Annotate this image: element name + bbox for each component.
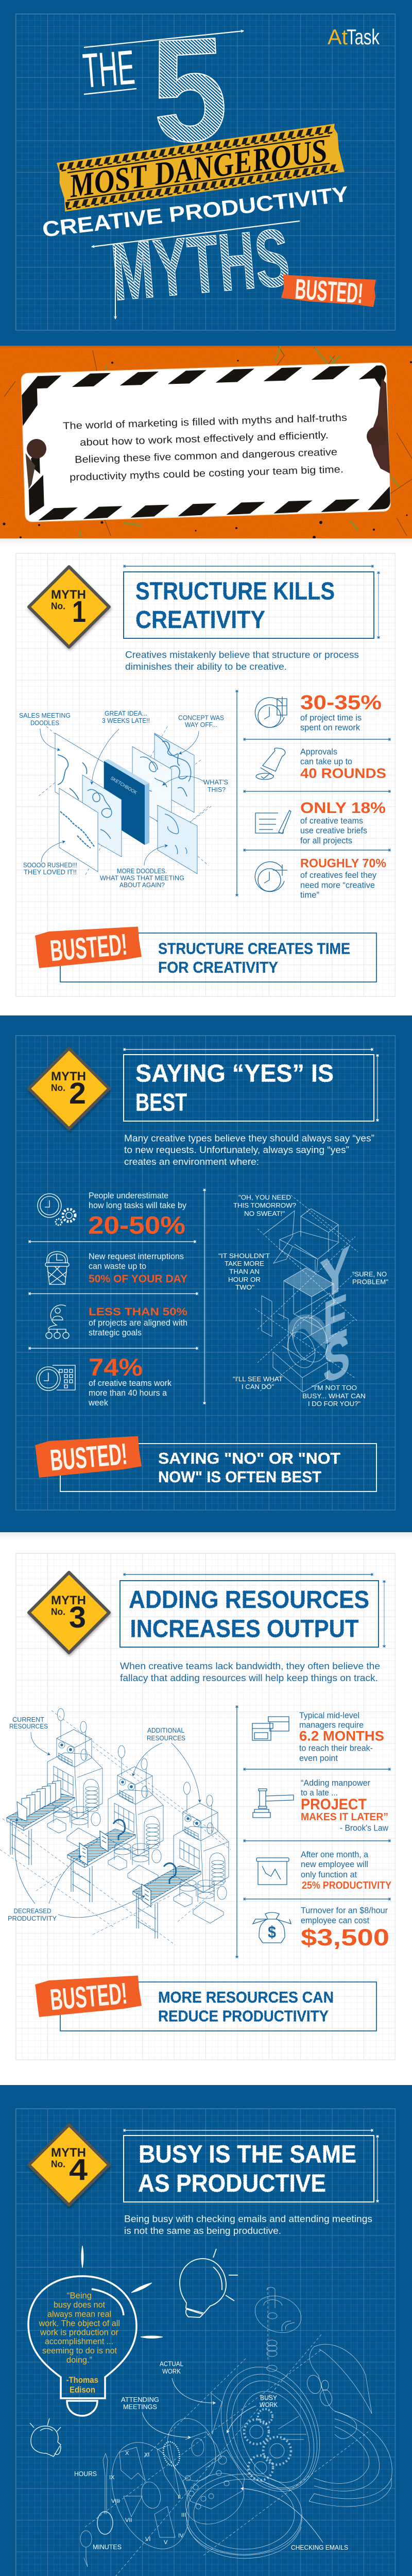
handwritten labels: MORE DOODLES. — [117, 867, 167, 875]
stat: roughly 70% want time: of creatives feel they — [300, 871, 377, 880]
divider — [29, 1348, 198, 1349]
handwritten labels: RESOURCES — [9, 1722, 48, 1730]
grid frame myth 3 — [16, 1553, 395, 2060]
handwritten quotes: "I'LL SEE WHAT — [233, 1375, 283, 1383]
stat: only 18% use briefs: use creative briefs — [300, 826, 367, 836]
headline box myth 2: BEST — [135, 1089, 187, 1116]
stat: only 18% use briefs: of creative teams — [300, 817, 363, 826]
callout arrows — [15, 1732, 200, 1918]
handwritten quotes: BUSY... WHAT CAN — [302, 1392, 366, 1400]
stat: 30-35% rework: 30-35% — [300, 691, 382, 714]
handwritten quotes: "SURE, NO — [352, 1270, 387, 1278]
handwritten labels: SOOOO RUSHED!!! — [23, 861, 77, 869]
handwritten labels — [74, 2360, 348, 2551]
watch movement plate — [160, 2412, 253, 2534]
myth 4 intro text: Being busy with checking emails and attending meetings — [124, 2214, 372, 2224]
handwritten quotes: TWO" — [235, 1283, 254, 1291]
headline box myth 2: SAYING “YES” IS — [135, 1060, 334, 1088]
illustration: exploded pocket watch — [74, 2287, 392, 2576]
section: myth 2 — [0, 1015, 412, 1532]
Edison quote: -Thomas — [66, 2376, 98, 2385]
page: concept doodles — [154, 733, 194, 812]
myth 1 intro text: diminishes their ability to be creative. — [125, 662, 287, 672]
headline box myth 2 — [124, 1049, 377, 1121]
robot 3 — [133, 1782, 229, 1939]
stat: underestimate 20-50%: how long tasks will take by — [89, 1201, 187, 1210]
handwritten labels: WAY OFF... — [185, 721, 217, 728]
watch dial: III — [181, 2512, 186, 2518]
robot 2 — [67, 1745, 163, 1902]
watch dial: II — [178, 2494, 181, 2500]
callout arrows — [40, 728, 204, 866]
stat: 74% over 40 hours: 74% — [89, 1353, 143, 1381]
headline box myth 1: CREATIVITY — [135, 606, 265, 634]
stat: 25% productivity: After one month, a — [301, 1850, 369, 1859]
handwritten labels: GREAT IDEA... — [105, 709, 147, 717]
stat: interruptions waste 50% of day: can waste up to — [89, 1262, 146, 1271]
watch crown and pendant — [250, 2287, 306, 2371]
Edison quote — [39, 2291, 120, 2395]
handwritten labels — [19, 709, 228, 889]
myth 3 intro text: fallacy that adding resources will help keep things on track. — [120, 1673, 378, 1683]
watch case — [203, 2352, 337, 2506]
stat: 25% productivity: new employee will — [301, 1860, 368, 1869]
stat: underestimate 20-50%: 20-50% — [88, 1212, 185, 1240]
solid letter shapes — [319, 1232, 351, 1397]
watch dial: VIII — [111, 2498, 120, 2504]
handwritten labels: ADDITIONAL — [147, 1726, 184, 1734]
AtTask logo: At — [328, 25, 348, 49]
busted banner myth 1 — [35, 927, 376, 982]
stat: less than 50% aligned: LESS THAN 50% — [89, 1306, 187, 1318]
stat: 74% over 40 hours: more than 40 hours a — [89, 1388, 167, 1398]
watch front rings — [186, 2474, 302, 2558]
watch dial: VII — [125, 2517, 132, 2523]
stat: Brook's law: MAKES IT LATER” — [301, 1811, 388, 1823]
stat: Brook's law — [253, 1778, 388, 1833]
stat: 74% over 40 hours — [37, 1353, 172, 1408]
Edison quote: seeming to do is not — [42, 2346, 117, 2355]
myth 2 intro text: to new requests. Unfortunately, always saying “yes” — [124, 1145, 349, 1155]
stat: 6.2 months break-even: to reach their break- — [299, 1744, 373, 1753]
sign: myth no. 3: 3 — [69, 1601, 86, 1634]
handwritten quotes: NO SWEAT!" — [244, 1210, 285, 1217]
section: orange intro plate — [0, 346, 412, 539]
sign: myth no. 2: MYTH — [51, 1070, 86, 1083]
handwritten quotes: I DO FOR YOU?" — [308, 1400, 360, 1408]
handwritten quotes: THIS TOMORROW? — [233, 1201, 296, 1209]
sign: myth no. 3: MYTH — [51, 1594, 86, 1607]
handwritten labels: THEY LOVED IT!! — [24, 868, 77, 876]
page: far sketches — [154, 734, 191, 782]
underline of The — [84, 89, 136, 94]
sign: myth no. 2: 2 — [69, 1077, 86, 1110]
stat: interruptions waste 50% of day: New request interruptions — [89, 1252, 184, 1261]
watch rear rings — [309, 2411, 392, 2506]
small light bulb — [30, 2418, 61, 2456]
sign: myth no. 3 — [29, 1572, 109, 1653]
busted banner myth 2: NOW" IS OFTEN BEST — [158, 1468, 321, 1486]
stat: roughly 70% want time: need more “creative — [300, 881, 375, 890]
title numeral: 5: 5 — [148, 6, 231, 174]
myth 2 intro text — [124, 1133, 374, 1167]
stat: Brook's law: to a late ... — [301, 1788, 338, 1798]
vertical divider myth 3 — [236, 1706, 237, 1958]
handwritten quotes — [218, 1194, 388, 1408]
headline box myth 4 — [124, 2130, 377, 2202]
headline box myth 3: INCREASES OUTPUT — [130, 1616, 358, 1642]
handwritten labels: WHAT'S — [203, 778, 228, 786]
vertical divider myth 1 — [236, 690, 237, 896]
handwritten labels: ABOUT AGAIN? — [119, 881, 165, 889]
sign: myth no. 2: No. — [51, 1083, 65, 1093]
busted stamp — [281, 273, 376, 310]
stat: less than 50% aligned: of projects are aligned with — [89, 1318, 187, 1328]
stat: roughly 70% want time — [255, 857, 386, 900]
vertical divider myth 2 — [204, 1189, 205, 1404]
handwritten quotes: "IT SHOULDN'T — [218, 1252, 270, 1260]
page: loved sketches — [59, 788, 98, 872]
sign: myth no. 1 — [29, 567, 109, 647]
watch back lid — [305, 2344, 372, 2439]
watch dial: IV — [178, 2533, 184, 2539]
stat: 30-35% rework: of project time is — [300, 714, 362, 723]
myth 4 intro text: is not the same as being productive. — [124, 2226, 281, 2236]
handwritten labels: MINUTES — [93, 2543, 122, 2551]
handwritten labels: CURRENT — [12, 1716, 44, 1723]
stat: 6.2 months break-even: managers require — [299, 1721, 364, 1730]
stat: $3,500 turnover: employee can cost — [301, 1916, 369, 1925]
handwritten labels: PRODUCTIVITY — [8, 1914, 57, 1922]
myth 2 intro text: creates an environment where: — [124, 1157, 259, 1167]
intro text: productivity myths could be costing your team big time. — [70, 464, 344, 483]
stat: 25% productivity: 25% PRODUCTIVITY — [302, 1880, 392, 1891]
grid frame myth 2 — [16, 1036, 395, 1510]
stat: $3,500 turnover — [253, 1906, 389, 1951]
arrow over Myths — [92, 221, 300, 247]
watch dial: VI — [145, 2536, 150, 2543]
sketchbook: SKETCHBOOK — [110, 775, 138, 795]
stat: interruptions waste 50% of day: 50% OF YOUR DAY — [89, 1273, 187, 1285]
headline box myth 1 — [124, 566, 379, 638]
illustration: large light bulb with Edison quote — [28, 2246, 163, 2416]
robot 1 — [7, 1708, 102, 1865]
busted banner myth 2: SAYING "NO" OR "NOT — [158, 1449, 340, 1467]
page: rushed sketches — [82, 775, 122, 857]
warning plate — [21, 363, 391, 522]
grid frame myth 1 — [16, 553, 395, 996]
divider — [29, 1293, 198, 1294]
handwritten labels: MEETINGS — [123, 2403, 157, 2411]
Edison quote: busy does not — [54, 2300, 105, 2310]
sign: myth no. 1: No. — [51, 601, 65, 611]
stat: 6.2 months break-even: 6.2 MONTHS — [299, 1728, 384, 1744]
stat: 40 rounds of approvals: 40 ROUNDS — [300, 766, 386, 781]
stat: 30-35% rework — [255, 691, 382, 733]
sign: myth no. 4: No. — [51, 2159, 65, 2169]
divider — [244, 739, 390, 740]
stat: 74% over 40 hours: of creative teams work — [89, 1379, 172, 1388]
sign: myth no. 4: MYTH — [51, 2146, 86, 2160]
busted banner myth 3: MORE RESOURCES CAN — [158, 1988, 334, 2006]
section: hero blueprint header — [0, 0, 412, 346]
sign: myth no. 3: No. — [51, 1606, 65, 1617]
stat: roughly 70% want time: time” — [300, 890, 319, 900]
Edison quote: Edison — [70, 2385, 95, 2395]
stat: interruptions waste 50% of day — [45, 1251, 187, 1285]
title word: Myths: MYTHS — [108, 212, 293, 318]
sketchbook — [104, 759, 149, 845]
sign: myth no. 4: 4 — [69, 2153, 88, 2187]
watch dial: V — [164, 2539, 168, 2546]
myth 1 intro text: Creatives mistakenly believe that structure or process — [125, 650, 359, 660]
Edison quote: always mean real — [47, 2310, 111, 2319]
solid letter shapes: S — [323, 1321, 350, 1397]
headline box myth 3: ADDING RESOURCES — [129, 1586, 369, 1614]
rust scratches and specks — [3, 346, 412, 539]
handwritten quotes: PROBLEM" — [352, 1278, 388, 1286]
busted banner myth 3 — [35, 1976, 376, 2031]
page: late idea — [132, 747, 171, 829]
handwritten labels: 3 WEEKS LATE!! — [102, 717, 150, 724]
vertical arrow below Myths — [115, 247, 116, 319]
Edison quote: accomplishment ... — [45, 2337, 113, 2346]
handwritten quotes: TAKE MORE — [225, 1260, 264, 1267]
stat: $3,500 turnover: $3,500 — [301, 1924, 389, 1951]
headline box myth 4: BUSY IS THE SAME — [139, 2141, 356, 2168]
handwritten labels: THIS? — [208, 786, 226, 793]
divider — [244, 791, 390, 792]
handwritten labels: WORK — [162, 2367, 181, 2375]
handwritten quotes: HOUR OR — [228, 1276, 261, 1283]
divider — [244, 1840, 390, 1841]
intro text — [63, 412, 347, 483]
handwritten labels: CONCEPT WAS — [178, 714, 224, 721]
watch gears — [244, 2409, 306, 2480]
myth 3 intro text — [120, 1661, 380, 1683]
divider — [244, 1769, 390, 1770]
watch dial: IX — [109, 2475, 115, 2481]
headline box myth 3 — [120, 1574, 384, 1647]
stat: 25% productivity — [256, 1850, 392, 1891]
busted banner myth 3: BUSTED! — [49, 1977, 129, 2016]
handwritten labels: RESOURCES — [147, 1734, 185, 1742]
solid letter shapes: E — [323, 1280, 348, 1359]
stat: underestimate 20-50% — [38, 1191, 187, 1240]
myth 1 intro text — [125, 650, 359, 672]
busted banner myth 1: FOR CREATIVITY — [158, 958, 278, 976]
handwritten labels: SALES MEETING — [19, 711, 71, 719]
stat: 74% over 40 hours: week — [88, 1398, 109, 1408]
title word: The: THE — [81, 40, 136, 98]
handwritten labels: CHECKING EMAILS — [291, 2544, 348, 2551]
stat: $3,500 turnover: $ — [268, 1923, 276, 1941]
stat: 6.2 months break-even: even point — [299, 1754, 338, 1763]
callout arrows — [142, 2378, 323, 2543]
illustration: exploded YES letters — [255, 1195, 358, 1397]
actual work page — [211, 2393, 222, 2434]
section: myth 1 — [0, 538, 412, 1015]
busted banner myth 2: BUSTED! — [49, 1437, 129, 1477]
stat: underestimate 20-50%: People underestimate — [89, 1191, 168, 1200]
sign: myth no. 1: 1 — [72, 595, 86, 629]
handwritten labels: DECREASED — [13, 1907, 52, 1915]
handwritten labels: ATTENDING — [121, 2396, 159, 2403]
handwritten labels — [8, 1716, 185, 1922]
stat: 6.2 months break-even: Typical mid-level — [299, 1711, 359, 1720]
headline box myth 1: STRUCTURE KILLS — [135, 578, 335, 605]
handwritten labels: BUSY — [260, 2394, 277, 2402]
stat: Brook's law: - Brook's Law — [340, 1824, 388, 1833]
section: myth 4 — [0, 2085, 412, 2576]
illustration: robots on conveyor lines — [0, 1708, 231, 1945]
handwritten quotes: "I'M NOT TOO — [312, 1384, 357, 1392]
AtTask logo: Task — [347, 25, 380, 49]
stat: Brook's law: PROJECT — [301, 1796, 367, 1813]
watch dial: X — [125, 2450, 129, 2456]
handwritten labels: ACTUAL — [160, 2360, 183, 2368]
section: myth 3 — [0, 1532, 412, 2085]
stat: less than 50% aligned — [46, 1305, 187, 1338]
handwritten quotes: I CAN DO" — [242, 1383, 274, 1391]
grid frame myth 4 — [16, 2109, 395, 2576]
myth 2 intro text: Many creative types believe they should always say “yes” — [124, 1133, 374, 1144]
AtTask logo — [328, 25, 380, 49]
sign: myth no. 1: MYTH — [51, 588, 86, 602]
stat: 6.2 months break-even — [252, 1711, 384, 1763]
watch dial: XI — [144, 2452, 149, 2458]
plate rivets — [27, 427, 386, 459]
divider — [244, 850, 390, 851]
stat: only 18% use briefs: ONLY 18% — [300, 800, 386, 817]
busted banner myth 1: BUSTED! — [49, 928, 129, 968]
arrow over The 5 — [84, 31, 244, 47]
busted banner myth 1: STRUCTURE CREATES TIME — [158, 940, 350, 957]
solid letter shapes: Y — [319, 1232, 351, 1315]
sign: myth no. 2 — [29, 1048, 109, 1129]
stat: roughly 70% want time: ROUGHLY 70% — [300, 857, 386, 871]
intro text: The world of marketing is filled with myths and half-truths — [63, 412, 347, 432]
title line: Creative Productivity: CREATIVE PRODUCTIVITY — [41, 181, 350, 242]
stat: 40 rounds of approvals — [256, 748, 386, 781]
handwritten labels: DOODLES — [30, 719, 59, 726]
caution tape: Most Dangerous: MOST DANGEROUS — [66, 132, 330, 205]
sign: myth no. 4 — [29, 2125, 109, 2205]
medium light bulb — [180, 2249, 238, 2317]
handwritten labels: WHAT WAS THAT MEETING — [100, 874, 184, 882]
busted banner myth 3: REDUCE PRODUCTIVITY — [158, 2007, 329, 2025]
stat: less than 50% aligned: strategic goals — [89, 1328, 142, 1337]
divider — [29, 1241, 196, 1242]
stat: 40 rounds of approvals: Approvals — [300, 748, 337, 757]
page: sales doodles — [55, 733, 104, 822]
hero grid frame — [16, 14, 395, 330]
handwritten labels: WORK — [260, 2401, 278, 2409]
wireframe outlines — [262, 1209, 339, 1392]
Edison quote: work. The object of all — [39, 2319, 120, 2328]
stat: 30-35% rework: spent on rework — [300, 723, 360, 733]
stat: only 18% use briefs: for all projects — [300, 836, 352, 845]
intro text: about how to work most effectively and efficiently. — [80, 430, 329, 448]
Edison quote: “Being — [67, 2291, 92, 2300]
watch hands — [80, 2453, 113, 2567]
myth 3 intro text: When creative teams lack bandwidth, they often believe the — [120, 1661, 380, 1671]
handwritten labels: HOURS — [74, 2470, 97, 2478]
Edison quote: doing.” — [66, 2355, 92, 2365]
watch dial — [97, 2431, 204, 2561]
Edison quote: work is production or — [40, 2328, 119, 2337]
page: final concept — [158, 805, 197, 874]
illustration: exploded sketchbook — [19, 709, 228, 889]
divider — [244, 1899, 390, 1900]
stat: 40 rounds of approvals: can take up to — [300, 757, 352, 767]
stat: Brook's law: “Adding manpower — [301, 1778, 370, 1788]
stat: $3,500 turnover: Turnover for an $8/hour — [301, 1906, 388, 1916]
headline box myth 4: AS PRODUCTIVE — [138, 2170, 326, 2197]
myth 4 intro text — [124, 2214, 372, 2236]
handwritten quotes: THAN AN — [229, 1267, 260, 1276]
stat: 25% productivity: only function at — [301, 1870, 357, 1879]
busted banner myth 2 — [35, 1436, 376, 1492]
stat: only 18% use briefs — [255, 800, 386, 845]
intro text: Believing these five common and dangerous creative — [75, 446, 337, 466]
handwritten quotes: "OH, YOU NEED — [238, 1194, 291, 1201]
